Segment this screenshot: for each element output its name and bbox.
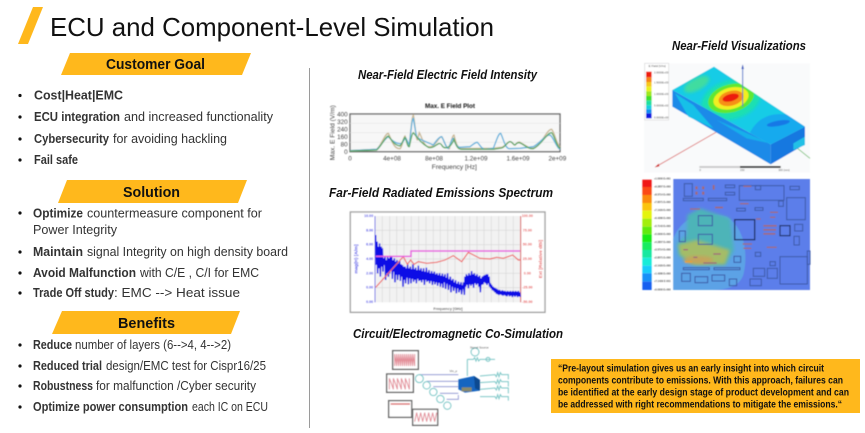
- panel: customer goal: [18, 53, 274, 167]
- list: customer goal: for avoiding hackling: [113, 132, 227, 146]
- panel: benefits: [18, 311, 268, 414]
- chart: max e field plot: 80: [341, 142, 348, 149]
- heading: near-field visualizations: Near-Field Visualizations: [672, 39, 806, 53]
- colour scale: +3.5714 E+000: [654, 247, 671, 251]
- chart: max e field plot: 1.6e+09: [506, 156, 530, 163]
- board: [673, 179, 810, 290]
- list: benefits: Optimize power consumption: [33, 400, 188, 414]
- banner: solution: Solution: [123, 185, 180, 201]
- list: benefits: Reduce: [33, 338, 72, 352]
- chart: max e field plot: 400: [337, 111, 348, 118]
- banner: customer goal: Customer Goal: [106, 57, 205, 73]
- list: customer goal: [18, 88, 274, 167]
- chart: far-field spectrum: -25.00: [522, 286, 533, 290]
- list: solution: [18, 206, 288, 300]
- colour legend: E Field [V/m]: [649, 64, 666, 68]
- chart: far-field spectrum: 4.00: [366, 257, 373, 261]
- chart: max e field plot: 0: [348, 156, 352, 163]
- chart: far-field spectrum: 50.00: [523, 243, 532, 247]
- list: solution: Trade Off study: [33, 286, 114, 300]
- chart: far-field spectrum: 10.00: [364, 214, 373, 218]
- list: solution: : EMC --> Heat issue: [114, 286, 240, 300]
- chart: far-field spectrum: 6.00: [366, 243, 373, 247]
- panel: solution: [18, 180, 288, 300]
- list: benefits: Reduced trial: [33, 359, 102, 373]
- chart: max e field plot: 240: [337, 127, 348, 134]
- colour legend: 1.5000E+03: [654, 80, 669, 84]
- colour scale: +6.4286 E+000: [654, 216, 671, 220]
- colour scale: +2.1429 E+000: [654, 263, 671, 267]
- list: customer goal: Fail safe: [34, 153, 78, 167]
- list: solution: Power Integrity: [33, 223, 118, 237]
- colour scale: +0.0000 E+000: [654, 287, 671, 291]
- list: benefits: [18, 338, 268, 414]
- chart: max e field plot: [330, 103, 567, 171]
- colour scale: +7.1429 E-001: [654, 279, 671, 283]
- chart: max e field plot: 2e+09: [548, 156, 567, 163]
- chart: far-field spectrum: Ext [Relative dBi]: [538, 239, 543, 278]
- colour legend: 2.0000E+03: [654, 70, 669, 74]
- chart: far-field spectrum: mag(H) [A/m]: [353, 244, 358, 274]
- chart: far-field spectrum: 100.00: [522, 214, 533, 218]
- colour scale: +5.0000 E+000: [654, 232, 671, 236]
- heading: circuit/electromagnetic co-simulation: Circuit/Electromagnetic Co-Simulation: [353, 327, 563, 341]
- chart: max e field plot: 1.2e+09: [464, 156, 488, 163]
- colour legend: 1.0000E+03: [654, 92, 669, 96]
- chart: far-field spectrum: 25.00: [523, 257, 532, 261]
- list: solution: Optimize: [33, 206, 83, 220]
- image: near-field 3d box: [644, 63, 810, 173]
- chart: max e field plot: Max. E Field Plot: [425, 103, 476, 110]
- scale bar: 0: [699, 168, 701, 172]
- colour scale: +5.7143 E+000: [654, 224, 671, 228]
- list: solution: countermeasure component for: [87, 206, 262, 220]
- list: customer goal: Cybersecurity: [34, 132, 109, 146]
- chart: max e field plot: Max. E Field (V/m): [330, 105, 337, 160]
- colour scale: +1.4286 E+000: [654, 271, 671, 275]
- colour scale: +1.0000 E+001: [654, 177, 671, 181]
- list: solution: with C/E , C/I for EMC: [139, 266, 259, 280]
- list: benefits: for malfunction /Cyber security: [96, 379, 257, 393]
- colour legend: 5.0000E+02: [654, 104, 669, 108]
- heading: far-field radiated emissions spectrum: Far-Field Radiated Emissions Spectrum: [329, 186, 553, 200]
- chart: far-field spectrum: Frequency [GHz]: [433, 307, 463, 311]
- colour legend: [645, 63, 669, 120]
- chart: max e field plot: 4e+08: [383, 156, 401, 163]
- chart: far-field spectrum: 0.00: [366, 300, 373, 304]
- callout: quote: [551, 359, 860, 413]
- axis arrows: [655, 129, 810, 167]
- diagram: circuit co-simulation: Vin_p: [450, 369, 457, 373]
- list: solution: Avoid Malfunction: [33, 266, 136, 280]
- list: benefits: number of layers (6-->4, 4-->2): [75, 338, 231, 352]
- colour scale: +2.8571 E+000: [654, 255, 671, 259]
- banner: customer goal: [61, 53, 251, 75]
- title text: ECU and Component-Level Simulation: [50, 12, 494, 42]
- chart: far-field spectrum: 75.00: [523, 228, 532, 232]
- banner: benefits: Benefits: [118, 316, 175, 332]
- diagram: circuit co-simulation: Signal Source: [470, 345, 489, 349]
- image: pcb heat map: [642, 177, 810, 291]
- chart: max e field plot: Frequency [Hz]: [432, 164, 477, 171]
- list: benefits: design/EMC test for Cispr16/25: [106, 359, 266, 373]
- chart: far-field spectrum: 8.00: [366, 228, 373, 232]
- chart: max e field plot: 0: [344, 149, 348, 156]
- list: solution: Maintain: [33, 245, 83, 259]
- chart: far-field spectrum: [350, 212, 545, 312]
- icon: title slash: [18, 7, 43, 44]
- colour scale: +8.5714 E+000: [654, 192, 671, 196]
- list: solution: signal Integrity on high density board: [87, 245, 288, 259]
- colour scale: +7.8571 E+000: [654, 200, 671, 204]
- banner: benefits: [52, 311, 240, 334]
- chart: far-field spectrum: 0.00: [524, 271, 531, 275]
- chart: max e field plot: 8e+08: [425, 156, 443, 163]
- colour scale: +4.2857 E+000: [654, 240, 671, 244]
- diagram: circuit co-simulation: [387, 345, 508, 425]
- scale bar: 300 (mm): [778, 168, 790, 172]
- list: customer goal: ECU integration: [34, 110, 120, 124]
- colour scale: [642, 177, 671, 291]
- scale bar: 150: [740, 168, 745, 172]
- colour scale: +7.1429 E+000: [654, 208, 671, 212]
- box faces: [672, 64, 810, 164]
- scale bar: [699, 166, 790, 172]
- list: benefits: each IC on ECU: [192, 400, 268, 414]
- title: [18, 7, 494, 44]
- chart: far-field spectrum: 0.00: [366, 286, 373, 290]
- list: customer goal: and increased functionality: [124, 110, 274, 124]
- colour scale: +9.2857 E+000: [654, 184, 671, 188]
- chart: max e field plot: 160: [337, 134, 348, 141]
- colour legend: 0.0000E+00: [654, 115, 669, 119]
- chart: far-field spectrum: 2.00: [366, 271, 373, 275]
- list: customer goal: Cost|Heat|EMC: [34, 88, 123, 102]
- chart: far-field spectrum: -50.00: [522, 300, 533, 304]
- heading: near-field electric field intensity: Near-Field Electric Field Intensity: [358, 68, 538, 82]
- chart: max e field plot: 320: [337, 119, 348, 126]
- banner: solution: [58, 180, 247, 203]
- list: benefits: Robustness: [33, 379, 93, 393]
